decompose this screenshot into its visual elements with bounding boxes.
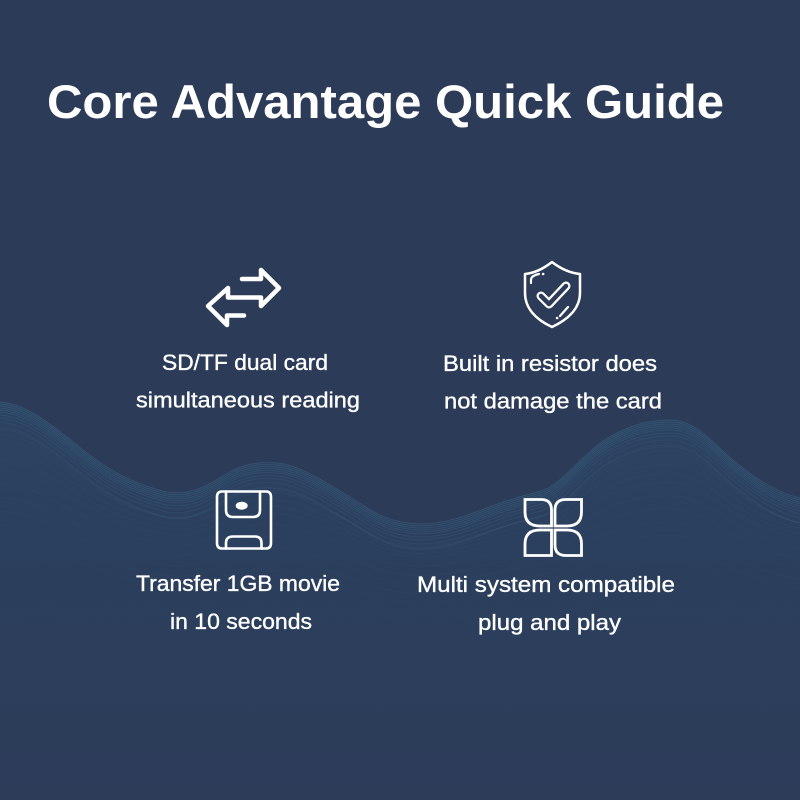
text: built in resistor xyxy=(443,351,662,414)
icon: transfer arrows xyxy=(208,270,279,325)
text: multi system xyxy=(417,572,675,635)
text: dual card reading xyxy=(136,350,360,412)
text: multi system: Multi system compatible xyxy=(417,572,675,597)
text: dual card reading: SD/TF dual card xyxy=(162,350,328,375)
title: Core Advantage Quick Guide xyxy=(47,75,724,128)
icon: floppy disk xyxy=(217,492,271,548)
wave pattern xyxy=(0,402,800,800)
feature: fast transfer xyxy=(136,492,340,634)
text: dual card reading: simultaneous reading xyxy=(136,388,360,412)
text: fast transfer: Transfer 1GB movie xyxy=(136,571,340,596)
text: fast transfer xyxy=(136,571,340,634)
feature: built in resistor xyxy=(443,262,662,414)
text: multi system: plug and play xyxy=(478,610,621,635)
text: built in resistor: Built in resistor does xyxy=(443,351,657,376)
icon: four petals xyxy=(525,500,582,556)
feature: dual card reading xyxy=(136,270,360,412)
feature: multi system xyxy=(417,500,675,635)
text: fast transfer: in 10 seconds xyxy=(170,609,312,634)
icon: shield with check xyxy=(525,262,580,327)
text: built in resistor: not damage the card xyxy=(444,388,662,414)
